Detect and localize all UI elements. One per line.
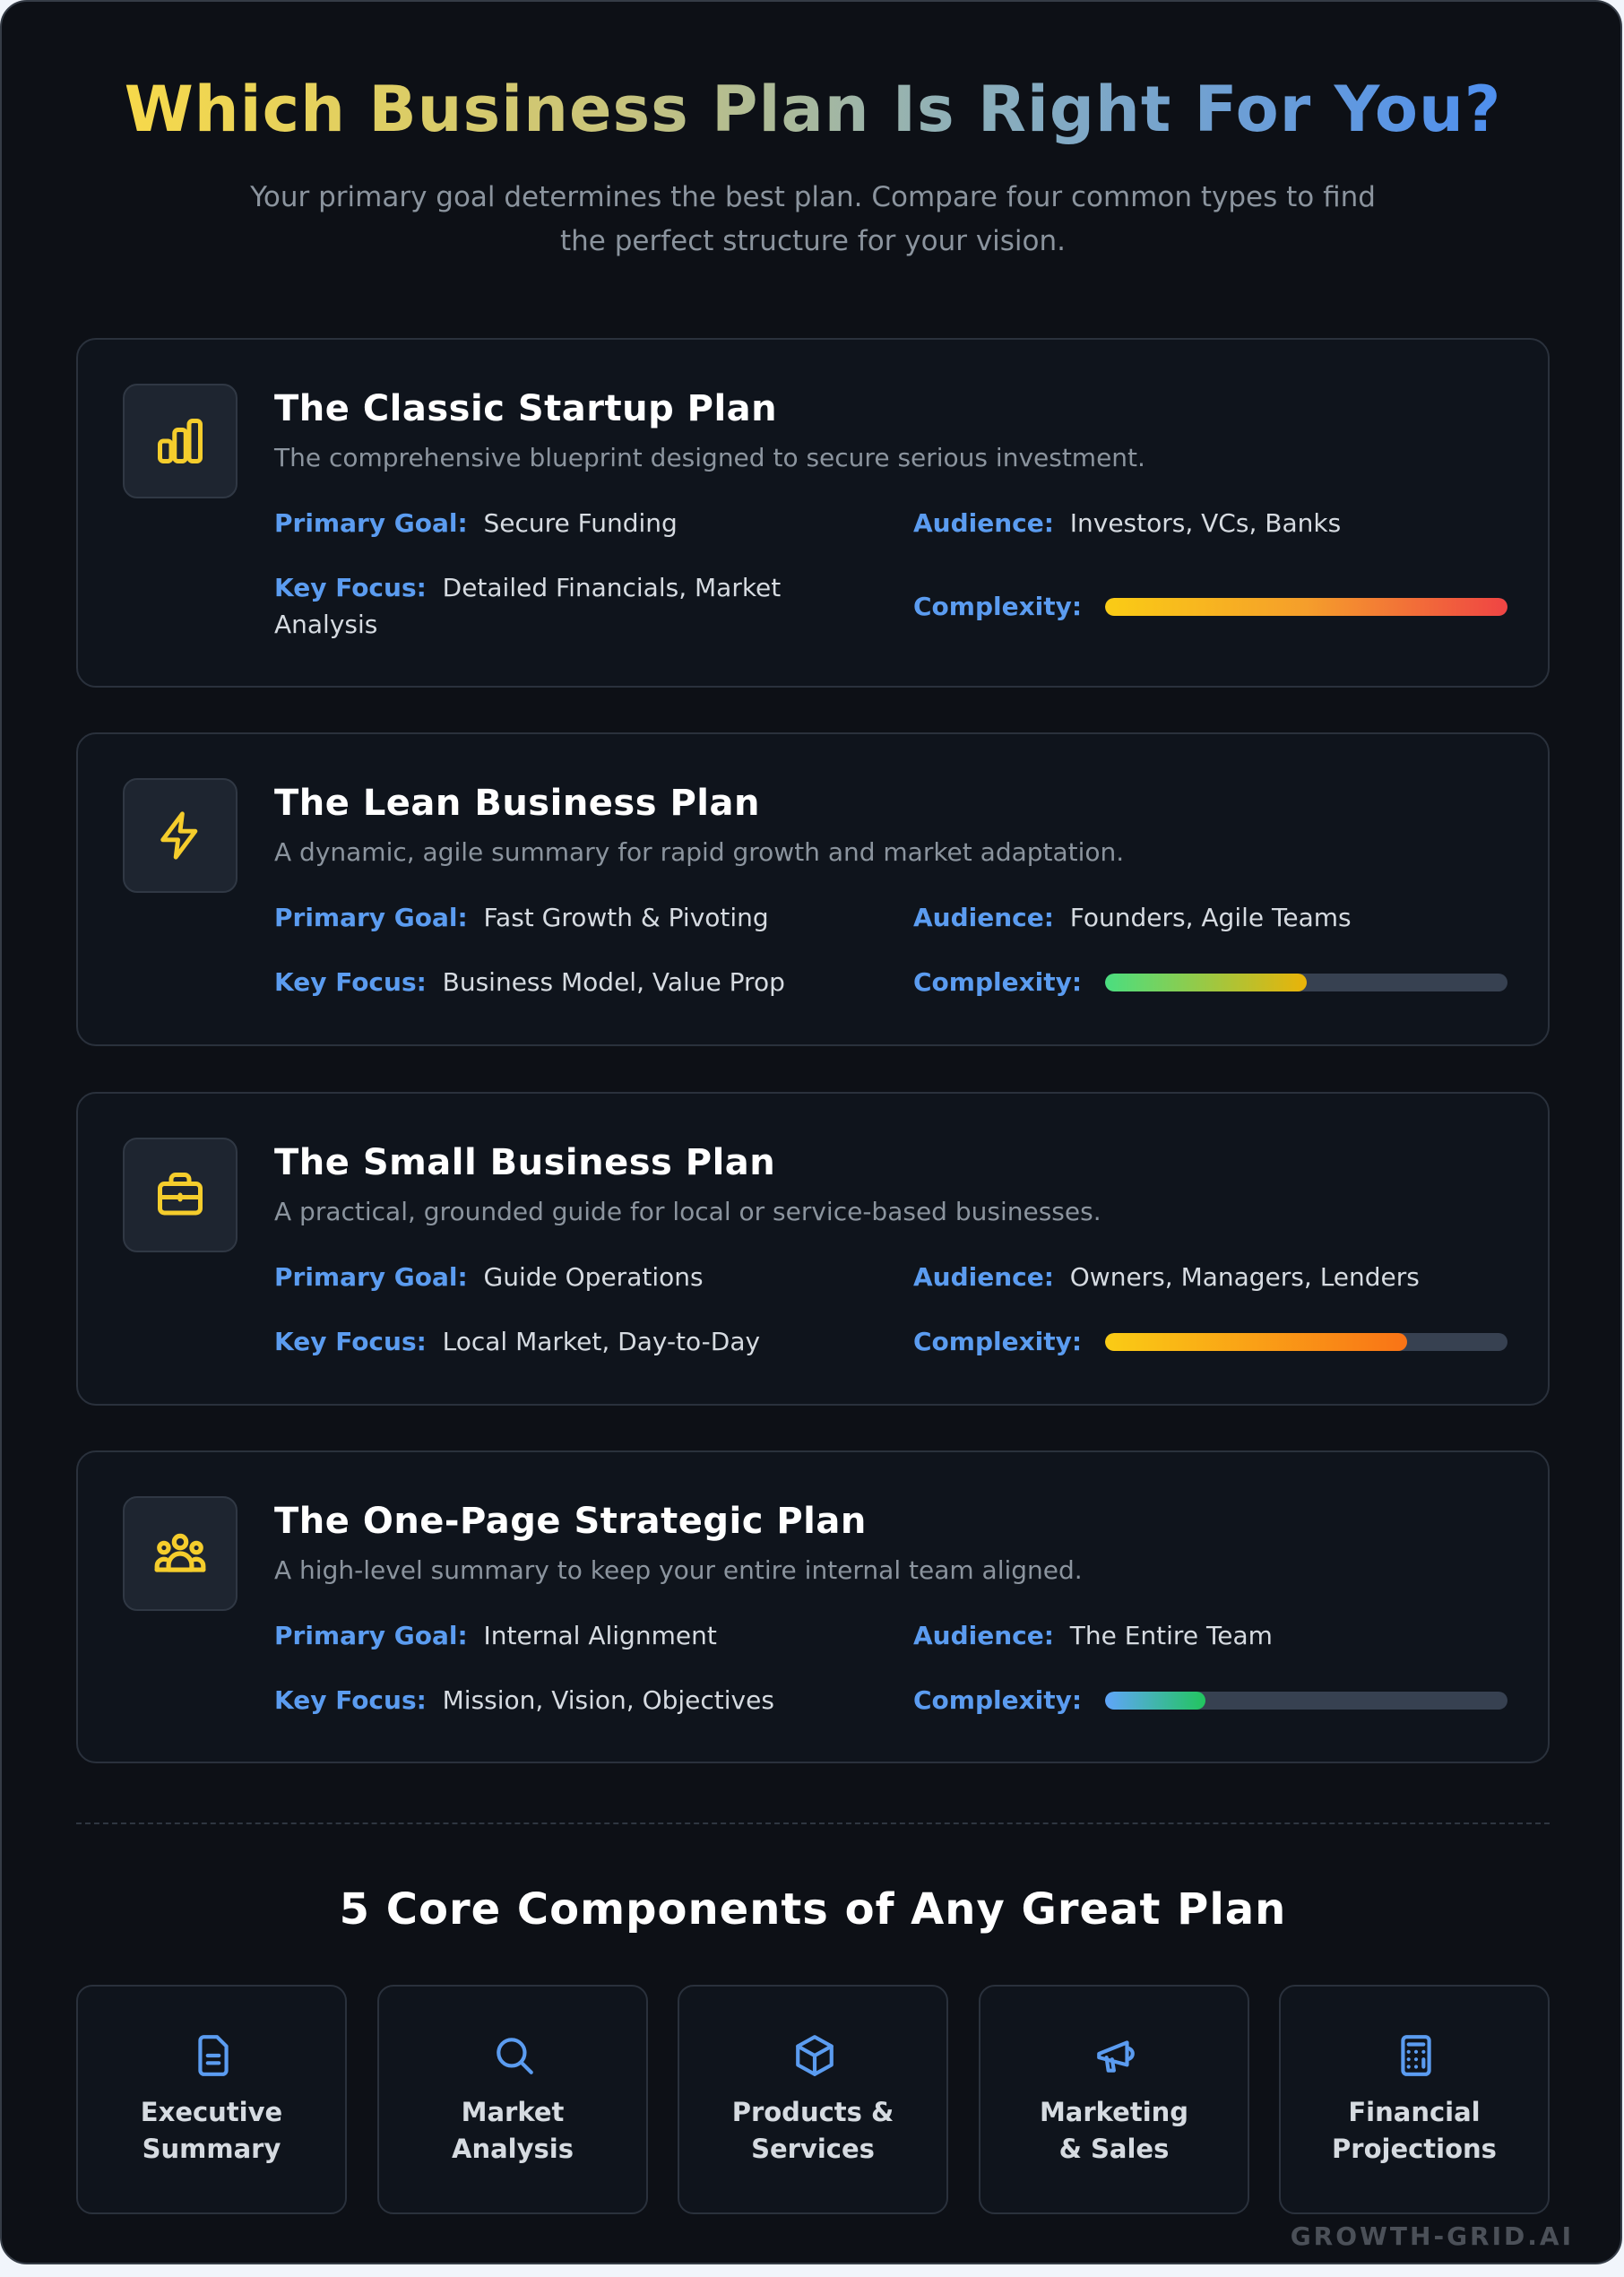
- primary goal: Primary Goal: Internal Alignment: [274, 1621, 717, 1650]
- complexity bar: [1105, 1333, 1507, 1351]
- component: market analysis: Market: [462, 2097, 564, 2127]
- complexity label: Complexity:: [913, 1685, 1082, 1715]
- complexity label: Complexity:: [913, 592, 1082, 621]
- description: A dynamic, agile summary for rapid growth and market adaptation.: [274, 837, 1124, 867]
- primary goal: Primary Goal: Secure Funding: [274, 508, 678, 538]
- audience: Audience: The Entire Team: [913, 1621, 1273, 1650]
- component: financial projections: [1279, 1985, 1550, 2214]
- section heading: 5 Core Components of Any Great Plan: [340, 1884, 1286, 1935]
- component: executive summary: Summary: [143, 2134, 281, 2164]
- description: A high-level summary to keep your entire internal team aligned.: [274, 1555, 1083, 1585]
- icon: briefcase: [123, 1138, 238, 1252]
- watermark: GROWTH-GRID.AI: [1291, 2221, 1574, 2251]
- heading: The One-Page Strategic Plan: [274, 1501, 867, 1542]
- key focus: Key Focus: Mission, Vision, Objectives: [274, 1685, 774, 1715]
- primary goal: Primary Goal: Guide Operations: [274, 1262, 704, 1292]
- component: executive summary: [76, 1985, 347, 2214]
- icon: bar chart: [123, 384, 238, 498]
- key focus: Key Focus: Local Market, Day-to-Day: [274, 1327, 760, 1356]
- heading: The Classic Startup Plan: [274, 388, 777, 429]
- panel: one-page strategic plan: [76, 1450, 1550, 1763]
- component: products & services: [678, 1985, 948, 2214]
- primary goal: Primary Goal: Fast Growth & Pivoting: [274, 903, 769, 932]
- component: financial projections: Projections: [1332, 2134, 1497, 2164]
- audience: Audience: Owners, Managers, Lenders: [913, 1262, 1420, 1292]
- panel: classic startup plan: [76, 338, 1550, 688]
- key focus: Key Focus: Business Model, Value Prop: [274, 967, 785, 997]
- component: financial projections: Financial: [1348, 2097, 1481, 2127]
- component: market analysis: Analysis: [452, 2134, 574, 2164]
- complexity label: Complexity:: [913, 1327, 1082, 1356]
- component: marketing & sales: & Sales: [1059, 2134, 1169, 2164]
- title: Which Business Plan Is Right For You?: [125, 73, 1501, 146]
- panel: lean business plan: [76, 732, 1550, 1046]
- panel: small business plan: [76, 1092, 1550, 1406]
- icon: lightning: [123, 778, 238, 893]
- complexity bar: [1105, 974, 1507, 991]
- heading: The Small Business Plan: [274, 1142, 775, 1183]
- component: market analysis: [377, 1985, 648, 2214]
- component: marketing & sales: [979, 1985, 1249, 2214]
- audience: Audience: Founders, Agile Teams: [913, 903, 1352, 932]
- audience: Audience: Investors, VCs, Banks: [913, 508, 1341, 538]
- component: products & services: Services: [751, 2134, 875, 2164]
- icon: team: [123, 1496, 238, 1611]
- complexity bar: [1105, 1692, 1507, 1710]
- complexity label: Complexity:: [913, 967, 1082, 997]
- complexity bar: [1105, 598, 1507, 616]
- component: products & services: Products &: [732, 2097, 894, 2127]
- component: executive summary: Executive: [141, 2097, 282, 2127]
- description: A practical, grounded guide for local or service-based businesses.: [274, 1197, 1101, 1226]
- description: The comprehensive blueprint designed to secure serious investment.: [274, 443, 1145, 472]
- heading: The Lean Business Plan: [274, 783, 760, 824]
- subtitle: Your primary goal determines the best plan. Compare four common types to find the perfect structure for your vision.: [250, 181, 1376, 257]
- component: marketing & sales: Marketing: [1040, 2097, 1188, 2127]
- key focus: Key Focus: Detailed Financials, Market Analysis: [274, 573, 781, 639]
